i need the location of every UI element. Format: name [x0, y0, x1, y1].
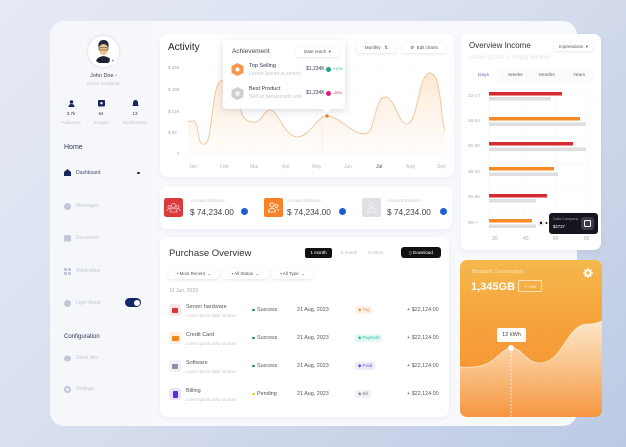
balance 1: Account Balance: [191, 198, 225, 203]
dropdown: date reach: [296, 47, 339, 57]
row: credit card: ◆ Payment: [358, 335, 379, 340]
balance 3: Account Balance: [387, 198, 421, 203]
toggle: [125, 298, 141, 307]
stat: notifications: Notifications: [123, 120, 147, 124]
nav: application: Application: [76, 268, 100, 274]
row: billing: ◆ Bill: [358, 391, 368, 396]
tooltip: 12 kWh: 12 kWh: [502, 332, 521, 338]
tabs: 6 month: [341, 250, 357, 255]
date: 12 Jun, 2023: [169, 288, 198, 294]
icon: orange: [264, 198, 283, 217]
dropdown: impressions: Impressions ▾: [559, 44, 588, 48]
row: server hardware: ◆ Tag: [358, 307, 369, 312]
dropdown: date reach: Date reach ▾: [304, 49, 331, 54]
stat: notifications: 13: [132, 110, 138, 116]
row: billing: [169, 388, 439, 402]
popup pointer: [323, 106, 330, 113]
button: edit charts: ⚙ Edit charts: [410, 45, 438, 50]
balance 2: [264, 198, 346, 217]
bar chart: 60: [553, 236, 559, 242]
panel: activity: [160, 34, 454, 177]
chart: May: [312, 164, 322, 170]
bar chart: [468, 91, 590, 242]
chart: Sep: [437, 164, 446, 170]
chart: Jan: [189, 164, 197, 170]
nav: settings: Settings: [76, 386, 94, 392]
item: top selling: Top Selling: [249, 63, 276, 69]
row: credit card: Lorem ipsum dolor sit amet: [186, 341, 237, 346]
item: best product: Sed ut perspiciatis und: [249, 94, 301, 100]
row: server hardware: + $22,124.00: [407, 307, 439, 313]
balance 2: Account Balance: [287, 198, 321, 203]
bar chart: 36-44: [468, 169, 480, 174]
chart: Jul: [376, 164, 382, 170]
row: server hardware: Server hardware: [186, 304, 227, 310]
stat: followers: 3.7k: [67, 110, 75, 116]
button: edit charts: [402, 43, 446, 53]
item: best product: -26%: [333, 90, 342, 94]
filters: ▪ All Status ⌄: [232, 270, 259, 276]
filters: [168, 270, 314, 281]
row: software: Software: [186, 360, 208, 366]
balance 3: $ 74,234.00: [387, 206, 431, 216]
tooltip: 12 kWh: [497, 328, 526, 342]
row: credit card: + $22,124.00: [407, 335, 439, 341]
nav: settings: [64, 386, 94, 393]
nav: stack dev: [64, 355, 98, 362]
bar chart: 13-17: [468, 93, 480, 98]
stat: images: 64: [98, 110, 104, 116]
name: John Doe ◦: [90, 73, 117, 79]
tabs: [468, 69, 594, 83]
button: download: [401, 247, 441, 258]
row: billing: 21 Aug, 2023: [297, 391, 329, 397]
area chart: [460, 300, 602, 417]
row: credit card: Success: [257, 335, 277, 341]
item: top selling: +17%: [333, 66, 343, 70]
chart: Apr: [282, 164, 290, 170]
heading: Overview Income: [469, 40, 531, 50]
row: credit card: 21 Aug, 2023: [297, 335, 329, 341]
button: download: ▯ Download: [409, 250, 433, 255]
subtitle: Lorem Ipsum is simply dummy: [469, 55, 550, 61]
button: monthly: Monthly ⇅: [365, 45, 388, 50]
row: credit card: Credit Card: [186, 332, 214, 338]
row: software: Success: [257, 363, 277, 369]
item: best product: Best Product: [249, 86, 280, 92]
sidebar: [50, 21, 152, 426]
tooltip: data company: $2737: [553, 224, 565, 229]
tabs: Days: [478, 73, 489, 78]
chart: Feb: [220, 164, 229, 170]
chart: $ 6K: [168, 130, 177, 135]
title: Bandwith Consumption: [472, 269, 523, 275]
stat: notifications: [123, 100, 147, 124]
nav: document: [64, 235, 99, 242]
tooltip: data company: Data Company: [553, 217, 578, 221]
row: software: 21 Aug, 2023: [297, 363, 329, 369]
nav: dashboard: Dashboard: [76, 170, 100, 176]
panel: overview income: [461, 34, 601, 250]
item: top selling: [232, 63, 343, 77]
avatar: [88, 36, 119, 67]
row: billing: + $22,124.00: [407, 391, 439, 397]
icon: grey: [362, 198, 381, 217]
icon: orange badge: [232, 63, 244, 76]
main panel: [50, 21, 577, 426]
tabs: 1 month: [310, 250, 327, 255]
bar chart: 25-35: [468, 143, 480, 148]
tooltip: data company: [549, 213, 598, 234]
nav: dashboard: [64, 169, 140, 176]
stats row: [61, 100, 147, 125]
row: software: [169, 360, 439, 374]
row: billing: Lorem ipsum dolor sit amet: [186, 397, 237, 402]
bar chart: 18-24: [468, 118, 480, 123]
stat: followers: [61, 100, 81, 124]
bar chart: 80: [584, 236, 590, 242]
bar chart: 55++: [468, 220, 479, 225]
icon: gear: [583, 268, 593, 278]
row: billing: Billing: [186, 388, 201, 394]
panel: account balances: [160, 187, 452, 229]
balance 2: $ 74,234.00: [287, 206, 331, 216]
tabs: Weeks: [508, 73, 523, 78]
row: software: Lorem ipsum dolor sit amet: [186, 369, 237, 374]
button: monthly: [357, 43, 396, 53]
row: server hardware: [169, 304, 439, 318]
filters: ▪ Most Recent ⌄: [177, 270, 211, 276]
chart: $ 12K: [168, 109, 180, 114]
item: top selling: $1,234K: [306, 66, 325, 72]
nav: document: Document: [76, 235, 99, 241]
nav: light mode: Light Mode: [76, 300, 101, 306]
panel: bandwidth consumption: [460, 260, 602, 417]
row: software: + $22,124.00: [407, 363, 439, 369]
item: top selling: Lorem Ipsum is simply: [249, 71, 301, 77]
tabs: Years: [573, 73, 585, 78]
dropdown: impressions: [554, 42, 593, 51]
heading: home: Home: [64, 144, 83, 151]
tabs: Months: [539, 73, 555, 78]
chart: Mar: [250, 164, 259, 170]
bar chart: 45-55: [468, 194, 480, 199]
bar chart: 40: [523, 236, 529, 242]
value: 1,345GB: [471, 281, 515, 293]
stat: images: Images: [94, 120, 108, 124]
row: software: ◆ Food: [358, 363, 372, 368]
chart: Aug: [406, 164, 415, 170]
chart: 0: [177, 151, 180, 156]
nav: light mode: [64, 298, 141, 307]
panel: purchase overview: [160, 237, 449, 417]
filters: ▪ All Type ⌄: [280, 270, 305, 276]
stat: images: [94, 100, 108, 125]
tabs: [305, 248, 384, 258]
bar chart: 20: [492, 236, 498, 242]
chart: Jun: [344, 164, 352, 170]
popup: achievement: [223, 40, 345, 109]
balance 3: [362, 198, 447, 217]
row: server hardware: Success: [257, 307, 277, 313]
heading: configuration: Configuration: [64, 334, 100, 340]
heading: activity: Activity: [168, 42, 200, 53]
stat: followers: Followers: [61, 120, 81, 124]
icon: red: [164, 198, 183, 217]
balance 1: $ 74,234.00: [190, 206, 234, 216]
row: billing: Pending: [257, 391, 277, 397]
row: server hardware: 21 Aug, 2023: [297, 307, 329, 313]
role: UI/UX Designer: [87, 82, 120, 87]
tabs: Custom: [368, 250, 384, 255]
item: best product: [232, 86, 342, 100]
percent badge: [518, 280, 542, 292]
row: server hardware: Lorem ipsum dolor sit amet: [186, 313, 237, 318]
percent badge: ↗ 13%: [524, 284, 536, 289]
nav: stack dev: Stack dev: [76, 355, 98, 361]
balance 1: [164, 198, 248, 217]
icon: grey badge: [232, 87, 244, 100]
chart: $ 25K: [168, 65, 180, 70]
popup title: Achievement: [232, 48, 270, 55]
item: best product: $1,234K: [306, 90, 325, 96]
nav: messages: Messages: [76, 203, 99, 209]
nav: application: [64, 268, 100, 275]
heading: Purchase Overview: [169, 248, 251, 258]
chart: [168, 65, 446, 170]
chart: $ 18K: [168, 87, 180, 92]
nav: messages: [64, 203, 99, 210]
row: credit card: [169, 332, 439, 346]
